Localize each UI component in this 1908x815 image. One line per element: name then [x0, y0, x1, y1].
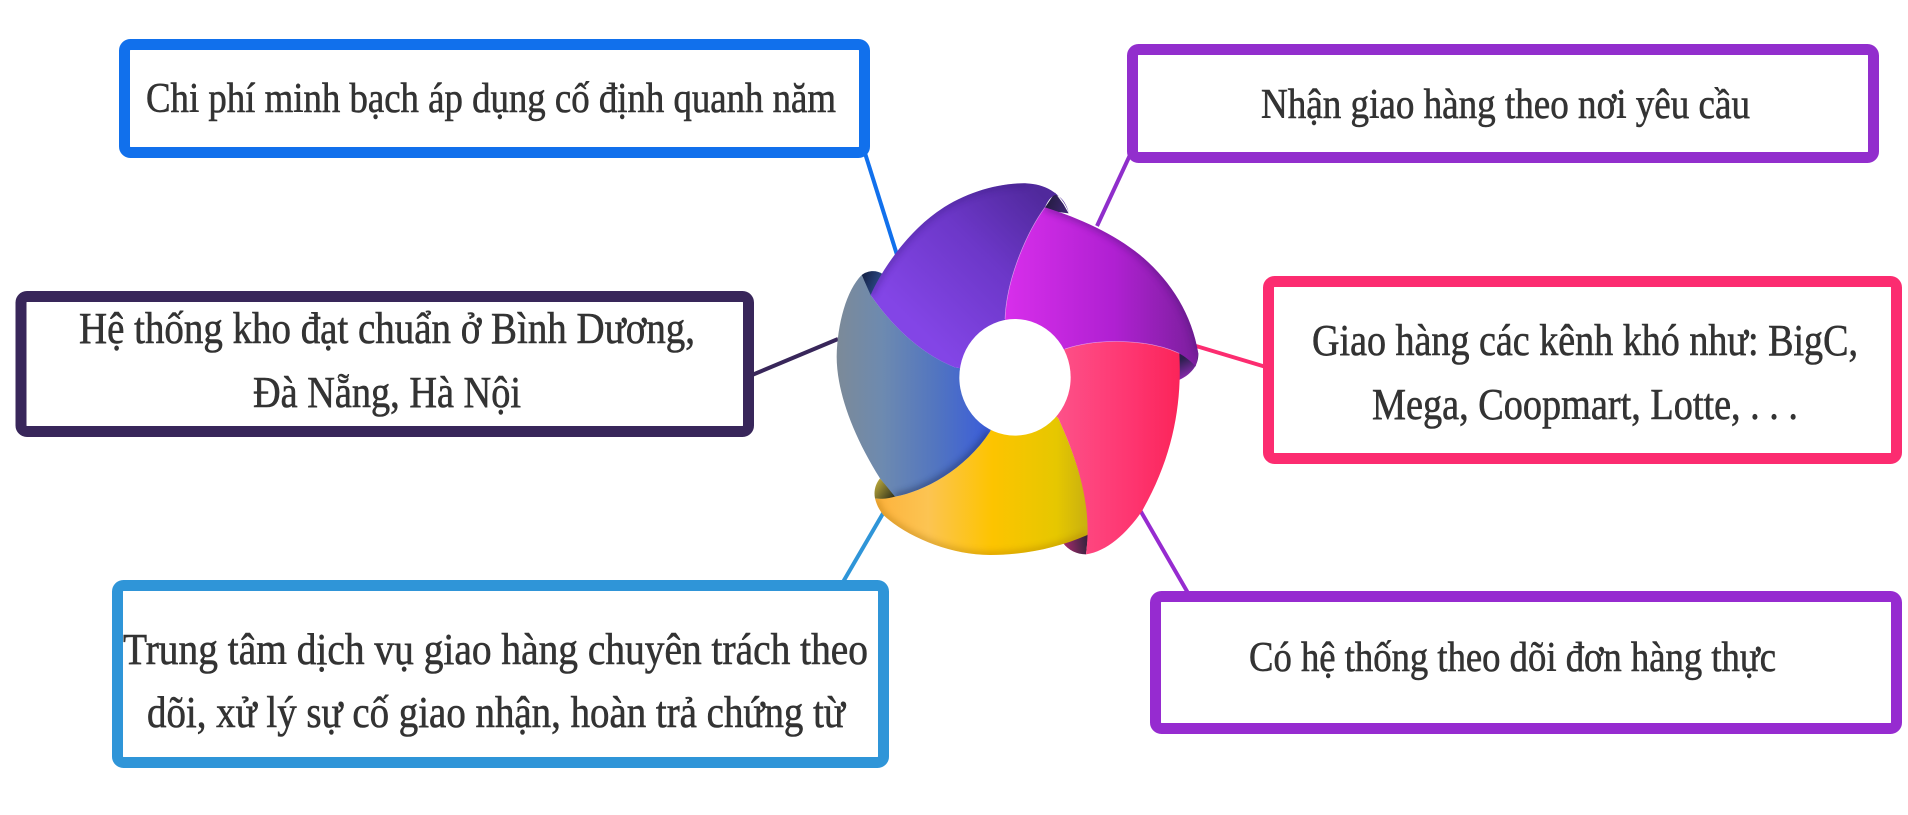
box: purple top-right — [1132, 50, 1874, 158]
text: service center — [123, 625, 868, 737]
text: transparent pricing: Chi phí minh bạch áp dụng cố định quanh năm — [146, 76, 836, 122]
fold: yellow back — [874, 478, 897, 499]
fold: pink back — [1063, 533, 1088, 554]
segment: violet — [871, 183, 1069, 377]
fold: violet back — [1043, 193, 1069, 213]
connector: purple bottom-right — [1140, 510, 1188, 593]
segment: magenta — [1005, 207, 1198, 377]
text: warehouse system: Đà Nẵng, Hà Nội — [253, 368, 521, 417]
segment: pink — [1015, 341, 1180, 554]
connector: light blue bottom-left — [843, 510, 885, 582]
text: warehouse system: Hệ thống kho đạt chuẩn ở Bình Dương, — [79, 304, 695, 353]
text: order tracking: Có hệ thống theo dõi đơn hàng thực — [1249, 635, 1776, 681]
segment: blue — [836, 275, 991, 497]
box: blue top-left — [124, 44, 864, 152]
connector: blue top-left — [864, 150, 898, 258]
text: service center: Trung tâm dịch vụ giao hàng chuyên trách theo — [123, 625, 868, 674]
central 3D ring icon — [837, 183, 1198, 555]
text: service center: dõi, xử lý sự cố giao nhận, hoàn trả chứng từ — [147, 688, 847, 737]
fold: magenta back — [1177, 352, 1198, 380]
fold: blue back — [862, 271, 883, 297]
highlight: segment seams — [1005, 207, 1179, 353]
segment: yellow — [875, 416, 1088, 555]
text: hard channels — [1312, 316, 1858, 429]
text: warehouse system — [79, 304, 695, 417]
box: purple bottom-right — [1156, 596, 1896, 728]
box: dark left — [21, 296, 748, 432]
text: delivery on request: Nhận giao hàng theo nơi yêu cầu — [1261, 82, 1750, 128]
connector: purple top-right — [1097, 155, 1130, 226]
box: light blue bottom-left — [118, 586, 884, 762]
text: hard channels: Mega, Coopmart, Lotte, . . . — [1372, 380, 1798, 429]
connector: pink right — [1196, 346, 1266, 367]
connector: dark left — [752, 339, 838, 375]
center hole — [959, 319, 1071, 436]
box: pink right — [1268, 282, 1896, 458]
